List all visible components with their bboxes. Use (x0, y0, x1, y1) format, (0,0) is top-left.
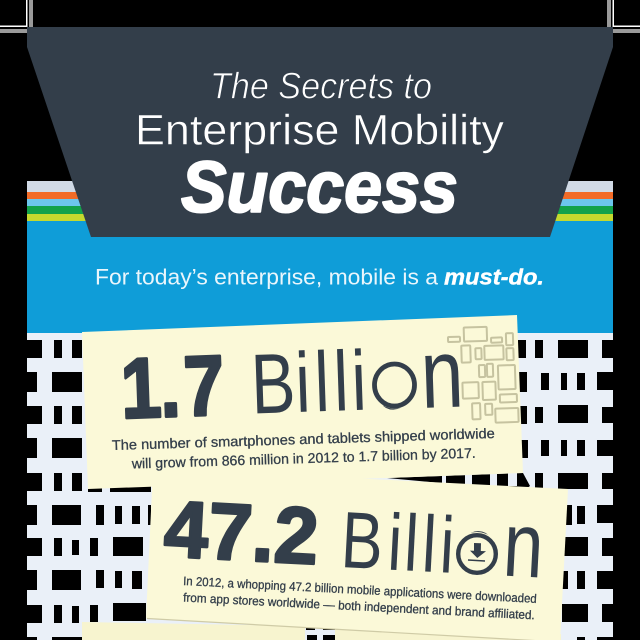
title line 1: The Secrets to (210, 66, 432, 106)
colour stripes band (27, 181, 613, 221)
card description: will grow from 866 million in 2012 to 1.7 billion by 2017. (131, 445, 476, 472)
stat number 1.7: 1.7 (119, 338, 226, 436)
card description: The number of smartphones and tablets shipped worldwide (112, 425, 495, 453)
panel: 47.2 billion card (146, 468, 568, 640)
subtitle: For today’s enterprise, mobile is a (95, 264, 438, 290)
card description (183, 574, 537, 622)
title line 3: Success (181, 148, 458, 228)
card description (112, 425, 495, 472)
stat word Billion: Billion (249, 317, 465, 435)
device icons cluster (448, 326, 519, 424)
stat number 47.2: 47.2 (162, 484, 321, 581)
stat word Billion: Billion (339, 485, 546, 598)
title line 2: Enterprise Mobility (135, 106, 505, 154)
panel: 1.7 billion card (82, 315, 523, 489)
blue band (27, 221, 613, 333)
title banner (27, 27, 613, 237)
lower cream card pieces (82, 622, 561, 640)
pattern background (27, 333, 613, 640)
card description: In 2012, a whopping 47.2 billion mobile applications were downloaded (183, 574, 537, 606)
letter o ring (371, 362, 418, 408)
crop marks (0, 0, 640, 33)
icon: download (455, 532, 499, 576)
card description: from app stores worldwide — both independent and brand affiliated. (183, 591, 535, 622)
subtitle: must-do. (444, 264, 544, 290)
